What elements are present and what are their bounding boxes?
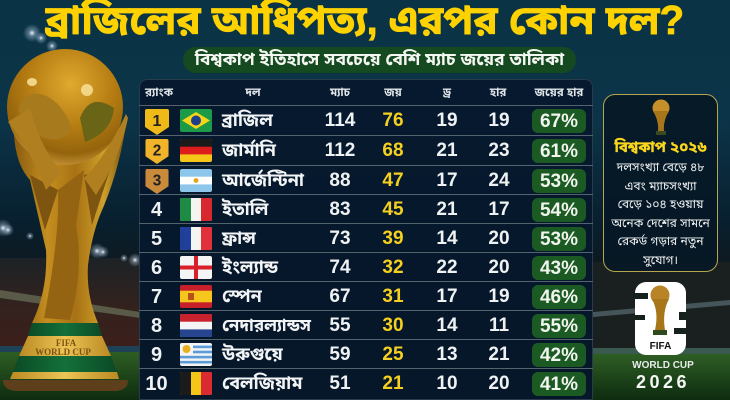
trophy photo illustration: WORLD CUP xyxy=(35,347,91,357)
row 9 Uruguay: 25 xyxy=(382,344,404,365)
row 3 Argentina: 88 xyxy=(329,170,351,191)
row 10 Belgium: 41% xyxy=(540,374,578,395)
row 1 Brazil xyxy=(139,105,593,135)
row 8 Netherlands: 55% xyxy=(540,316,578,337)
row 4 Italy: ইতালি xyxy=(222,199,268,219)
row 5 France: 5 xyxy=(151,228,162,250)
callout: World Cup 2026 xyxy=(603,94,718,272)
row 8 Netherlands: 55 xyxy=(329,315,351,336)
row 5 France: 14 xyxy=(436,228,458,249)
table header: হার xyxy=(490,87,506,99)
row 6 England: ইংল্যান্ড xyxy=(222,257,278,277)
trophy photo illustration xyxy=(3,49,128,391)
row 4 Italy: 45 xyxy=(382,199,404,220)
row 6 England xyxy=(139,252,593,282)
table header: ড্র xyxy=(443,87,451,99)
row 3 Argentina: আর্জেন্টিনা xyxy=(222,170,304,190)
row 8 Netherlands: 11 xyxy=(489,315,509,336)
row 5 France: 53% xyxy=(540,229,578,250)
row 5 France: 73 xyxy=(329,228,351,249)
logo: FIFA World Cup 2026 xyxy=(632,282,694,392)
row 5 France: 20 xyxy=(488,228,510,249)
row 4 Italy: 17 xyxy=(488,199,510,220)
callout text: সুযোগ। xyxy=(643,252,678,266)
row 7 Spain: 31 xyxy=(382,286,404,307)
row 9 Uruguay: 59 xyxy=(329,344,351,365)
row 10 Belgium xyxy=(139,368,593,398)
row 9 Uruguay: 9 xyxy=(151,344,162,366)
trophy globe xyxy=(7,49,128,195)
trophy base bands xyxy=(28,323,102,336)
row 4 Italy: 83 xyxy=(329,199,351,220)
row 3 Argentina: 47 xyxy=(382,170,404,191)
row 1 Brazil: ব্রাজিল xyxy=(222,110,273,130)
row 1 Brazil: 19 xyxy=(488,110,510,131)
row 3 Argentina: 24 xyxy=(488,170,510,191)
row 5 France xyxy=(139,223,593,253)
row 7 Spain: 46% xyxy=(540,287,578,308)
row 2 Germany: জার্মানি xyxy=(222,140,276,160)
row 3 Argentina: 3 xyxy=(153,172,161,189)
row 9 Uruguay: 13 xyxy=(436,344,458,365)
row 7 Spain xyxy=(139,281,593,311)
row 2 Germany: 61% xyxy=(540,141,578,162)
row 1 Brazil: 1 xyxy=(153,113,162,130)
callout text: অনেক দেশের সামনে xyxy=(611,216,710,230)
row 8 Netherlands: নেদারল্যান্ডস xyxy=(222,316,311,335)
row 10 Belgium: বেলজিয়াম xyxy=(222,373,302,393)
row 2 Germany: 2 xyxy=(153,142,161,159)
table header: দল xyxy=(245,87,261,99)
row 6 England: 32 xyxy=(382,257,404,278)
row 4 Italy: 21 xyxy=(436,199,458,220)
row 2 Germany: 21 xyxy=(436,140,458,161)
row 7 Spain: 17 xyxy=(436,286,458,307)
row 10 Belgium: 20 xyxy=(488,373,510,394)
row 8 Netherlands: 8 xyxy=(151,315,162,337)
row 6 England: 6 xyxy=(151,257,162,279)
table header: র‍্যাংক xyxy=(145,87,173,99)
row 4 Italy: 54% xyxy=(540,200,578,221)
table header: ম্যাচ xyxy=(330,87,350,99)
row 1 Brazil: 67% xyxy=(540,111,578,132)
row 5 France: 39 xyxy=(382,228,404,249)
row 6 England: 74 xyxy=(329,257,351,278)
callout text: রেকর্ড গড়ার নতুন xyxy=(618,234,703,248)
row 9 Uruguay: 21 xyxy=(488,344,510,365)
row 3 Argentina: 53% xyxy=(540,171,578,192)
trophy photo illustration: FIFA xyxy=(56,338,77,348)
row 6 England: 22 xyxy=(436,257,458,278)
row 8 Netherlands: 14 xyxy=(436,315,458,336)
row 2 Germany: 68 xyxy=(382,140,404,161)
row 2 Germany xyxy=(139,135,593,165)
table header: জয়ের হার xyxy=(535,87,583,99)
row 10 Belgium: 21 xyxy=(382,373,404,394)
row 6 England: 43% xyxy=(540,258,578,279)
row 1 Brazil: 76 xyxy=(382,110,404,131)
row 9 Uruguay: 42% xyxy=(540,345,578,366)
row 2 Germany: 23 xyxy=(488,140,510,161)
row 3 Argentina: 17 xyxy=(436,170,458,191)
trophy body xyxy=(14,125,126,323)
row 6 England: 20 xyxy=(488,257,510,278)
table header xyxy=(144,87,584,99)
logo text: WORLD CUP xyxy=(632,360,694,371)
callout text: দলসংখ্যা বেড়ে ৪৮ xyxy=(617,160,704,174)
icon: white 26 mark with trophy: FIFA xyxy=(650,341,671,352)
row 7 Spain: 67 xyxy=(329,286,351,307)
callout text: বেড়ে ১০৪ হওয়ায় xyxy=(618,197,703,211)
row 4 Italy: 4 xyxy=(151,199,162,221)
table header: জয় xyxy=(384,87,402,99)
row 8 Netherlands xyxy=(139,310,593,340)
row 1 Brazil: 19 xyxy=(436,110,458,131)
row 10 Belgium: 51 xyxy=(329,373,351,394)
icon: white 26 mark with trophy xyxy=(635,282,686,355)
callout heading: বিশ্বকাপ ২০২৬ xyxy=(615,139,706,156)
callout text xyxy=(611,160,710,267)
logo year: 2026 xyxy=(636,372,690,392)
row 7 Spain: 7 xyxy=(151,286,162,308)
subtitle pill: বিশ্বকাপ ইতিহাসে সবচেয়ে বেশি ম্যাচ জয়ের তালিকা xyxy=(195,49,564,69)
row 5 France: ফ্রান্স xyxy=(222,228,256,248)
row 10 Belgium: 10 xyxy=(145,373,168,395)
row 8 Netherlands: 30 xyxy=(382,315,404,336)
row 9 Uruguay: উরুগুয়ে xyxy=(222,344,283,364)
row 7 Spain: 19 xyxy=(488,286,510,307)
row 9 Uruguay xyxy=(139,339,593,369)
icon: small trophy xyxy=(652,100,670,135)
row 10 Belgium: 10 xyxy=(436,373,458,394)
row 4 Italy xyxy=(139,194,593,224)
row 7 Spain: স্পেন xyxy=(222,286,262,306)
row 3 Argentina xyxy=(139,165,593,195)
row 2 Germany: 112 xyxy=(325,140,355,161)
table panel xyxy=(139,79,593,400)
callout text: এবং ম্যাচসংখ্যা xyxy=(625,178,696,192)
row 1 Brazil: 114 xyxy=(325,110,355,131)
